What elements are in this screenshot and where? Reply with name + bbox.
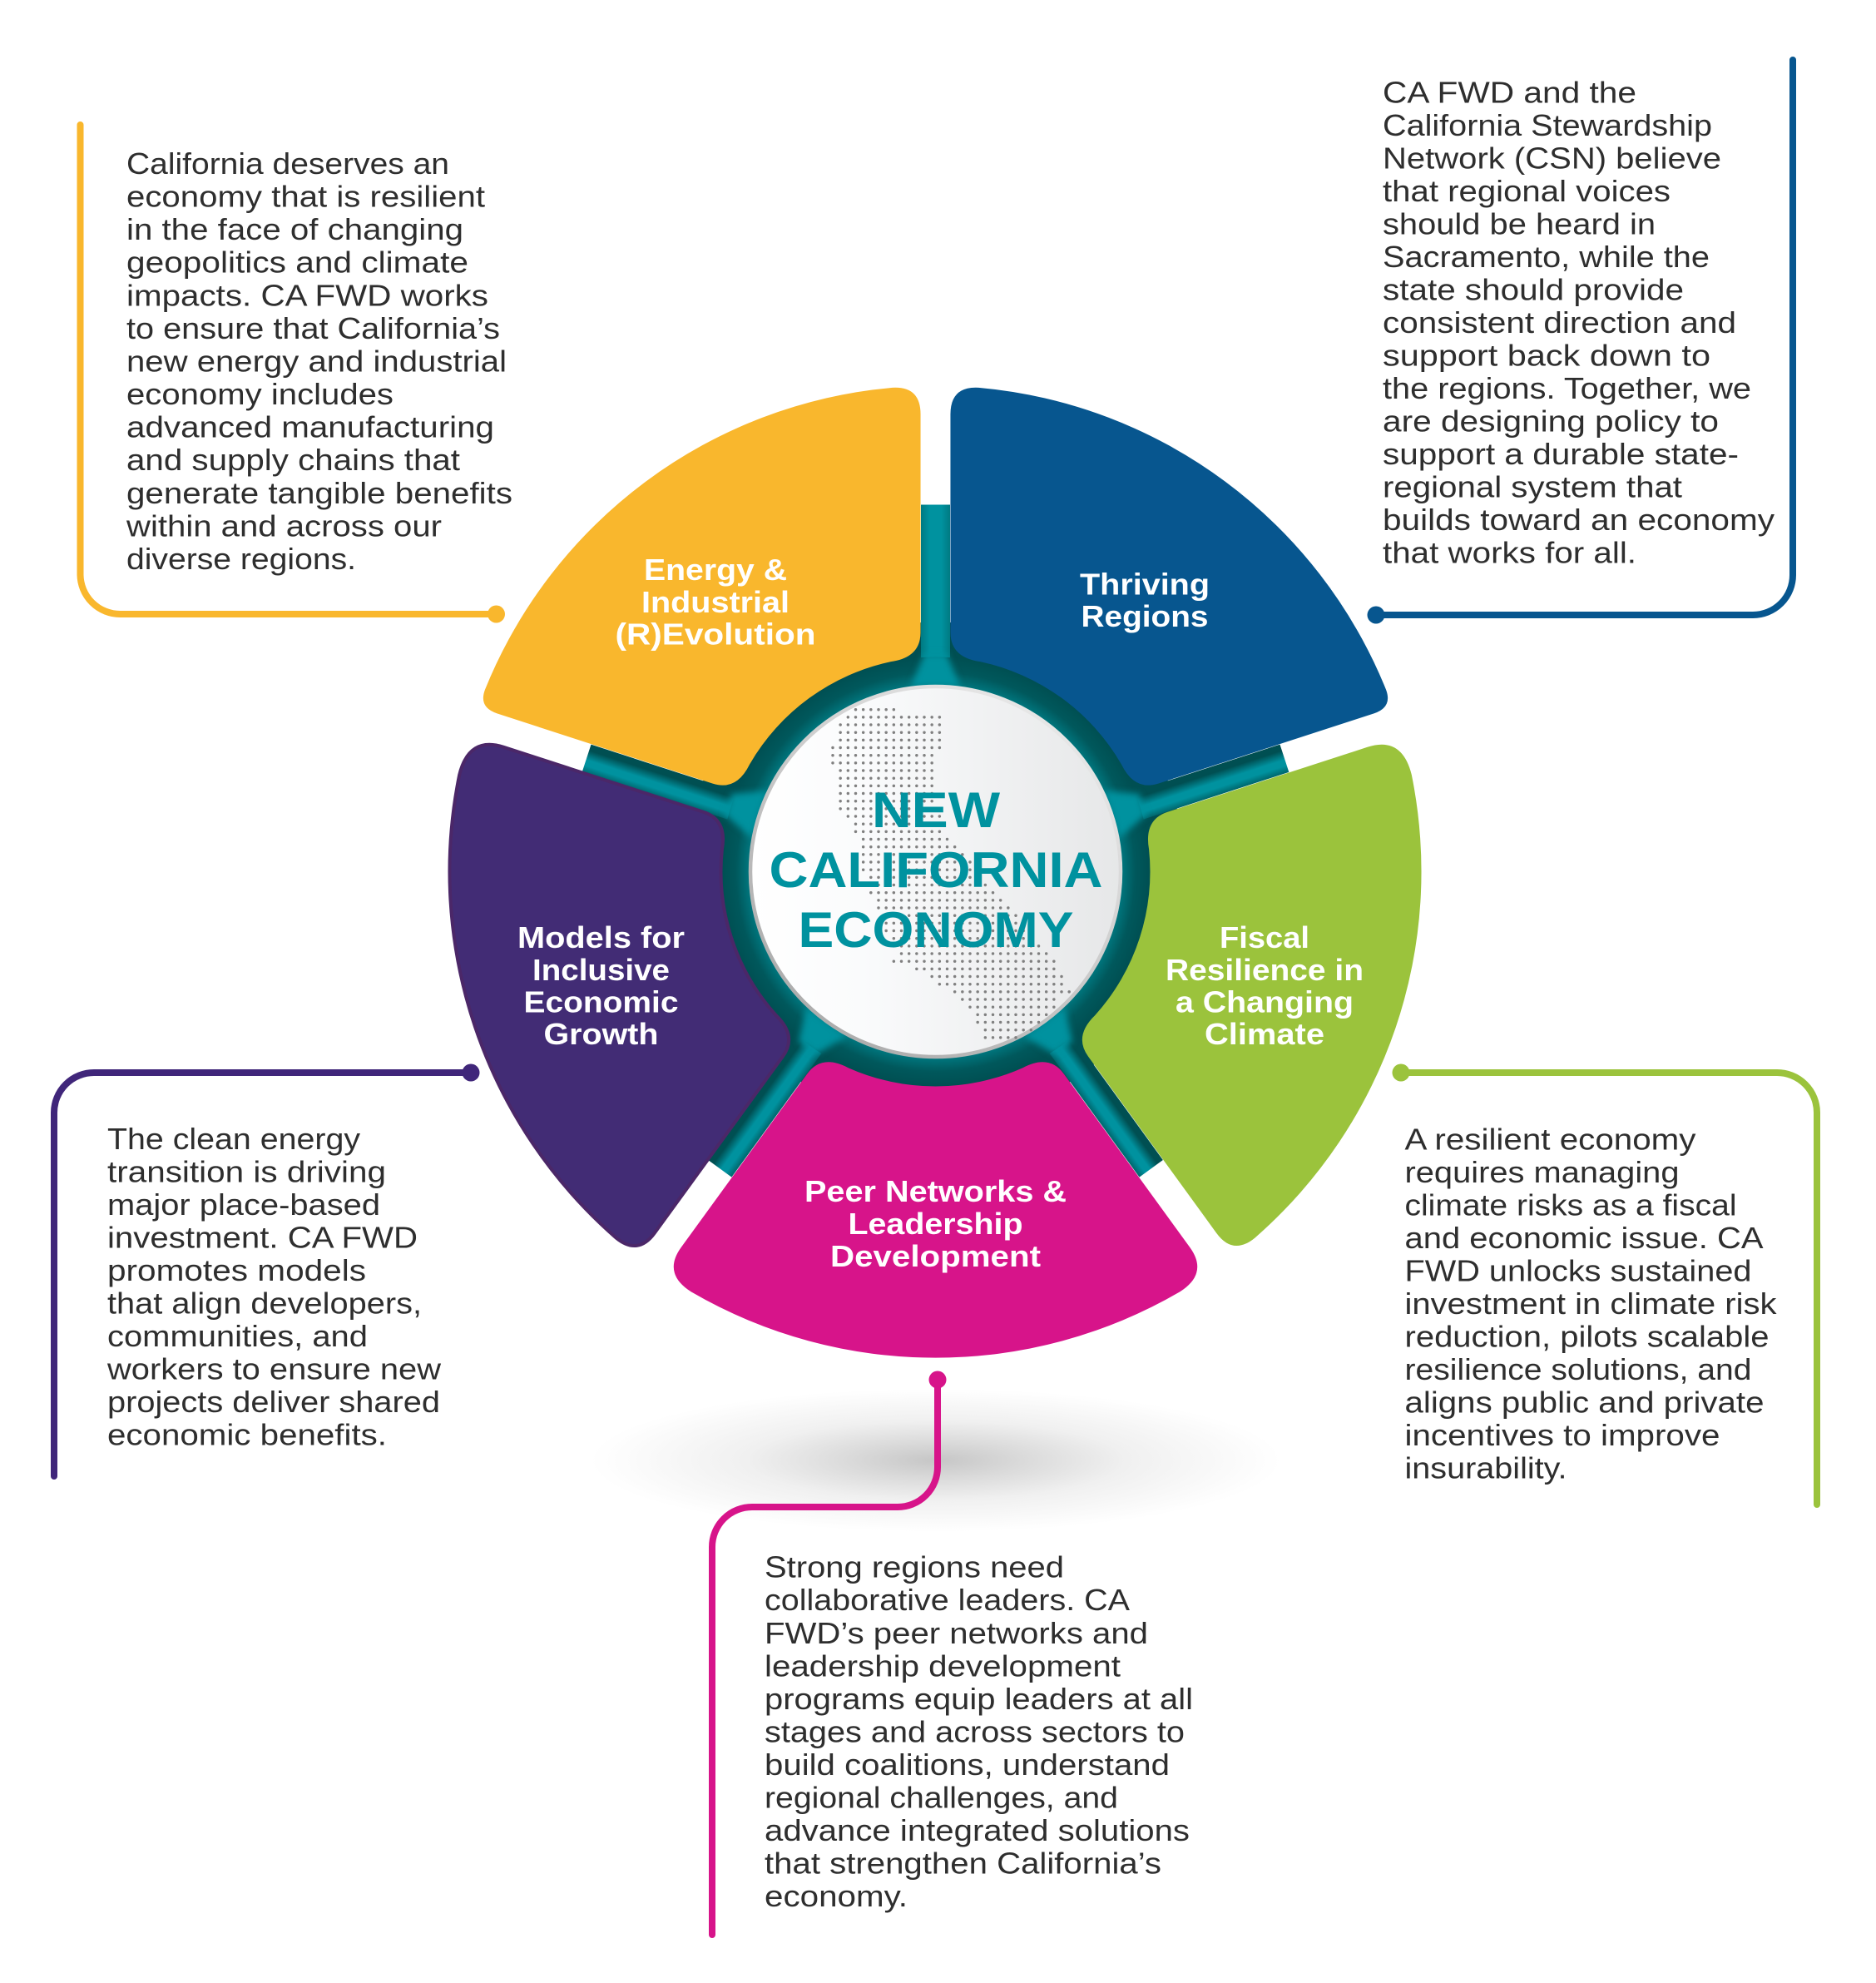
- heading: Energy & Industrial (R)Evolution: Energy &: [644, 553, 787, 587]
- text block: [1383, 75, 1775, 569]
- heading: Fiscal Resilience in a Changing Climate: Climate: [1205, 1017, 1324, 1051]
- text block: requires managing: [1404, 1155, 1679, 1189]
- connector line: [712, 1371, 947, 1935]
- heading: Fiscal Resilience in a Changing Climate: Resilience in: [1166, 953, 1364, 987]
- text block: FWD unlocks sustained: [1404, 1253, 1752, 1288]
- text block: state should provide: [1383, 273, 1684, 306]
- text block: stages and across sectors to: [765, 1714, 1185, 1748]
- heading: Energy & Industrial (R)Evolution: [616, 553, 815, 651]
- callout: Peer Networks & Leadership Development: [712, 1371, 1193, 1935]
- text block: that regional voices: [1383, 174, 1671, 208]
- text block: regional system that: [1383, 469, 1682, 504]
- heading: Thriving Regions: Regions: [1082, 599, 1208, 633]
- text block: aligns public and private: [1404, 1385, 1764, 1420]
- text block: support back down to: [1383, 338, 1710, 373]
- text block: and economic issue. CA: [1404, 1221, 1764, 1255]
- text block: programs equip leaders at all: [765, 1682, 1193, 1716]
- center disc with dotted California map and title: [750, 687, 1121, 1057]
- text block: geopolitics and climate: [126, 245, 468, 280]
- text block: [765, 1550, 1193, 1913]
- text block: Strong regions need: [765, 1550, 1064, 1584]
- heading: Peer Networks & Leadership Development: [804, 1174, 1067, 1273]
- text block: collaborative leaders. CA: [765, 1583, 1131, 1617]
- panel: Energy & Industrial (R)Evolution: [434, 324, 1037, 875]
- callout: Thriving Regions: [1368, 60, 1793, 624]
- text block: and supply chains that: [126, 443, 460, 477]
- connector line: [1368, 60, 1793, 624]
- text block: leadership development: [765, 1648, 1121, 1683]
- text block: incentives to improve: [1404, 1418, 1720, 1452]
- text block: that works for all.: [1383, 536, 1636, 569]
- panel: Fiscal Resilience in a Changing Climate: [1035, 683, 1478, 1272]
- heading: Peer Networks & Leadership Development: Leadership: [849, 1207, 1023, 1241]
- text block: to ensure that California’s: [126, 311, 500, 345]
- heading: Energy & Industrial (R)Evolution: Industrial: [641, 585, 790, 619]
- panel: Models for Inclusive Economic Growth: [393, 683, 836, 1272]
- text block: communities, and: [107, 1319, 368, 1353]
- text block: within and across our: [126, 508, 442, 543]
- heading: Thriving Regions: [1080, 568, 1210, 633]
- heading: Thriving Regions: Thriving: [1080, 568, 1210, 601]
- text block: insurability.: [1404, 1451, 1567, 1485]
- text block: A resilient economy: [1404, 1122, 1696, 1157]
- text block: should be heard in: [1383, 206, 1656, 241]
- text block: support a durable state-: [1383, 437, 1739, 471]
- connector line: [54, 1063, 479, 1476]
- text block: economy.: [765, 1879, 908, 1913]
- text block: projects deliver shared: [107, 1385, 440, 1419]
- text block: climate risks as a fiscal: [1404, 1188, 1737, 1222]
- teal hub: spokes and dark ring: [582, 504, 1289, 1177]
- text block: economy that is resilient: [126, 180, 485, 214]
- text block: [1404, 1122, 1777, 1485]
- text block: that strengthen California’s: [765, 1846, 1161, 1881]
- text block: Network (CSN) believe: [1383, 141, 1721, 175]
- text block: economy includes: [126, 377, 394, 411]
- connector line: [1393, 1063, 1817, 1505]
- text block: consistent direction and: [1383, 305, 1736, 340]
- text block: promotes models: [107, 1253, 366, 1287]
- text block: regional challenges, and: [765, 1780, 1118, 1814]
- ground shadow under the wheel: [591, 1389, 1281, 1532]
- icon: dotted California map: [833, 710, 1070, 1038]
- text block: economic benefits.: [107, 1418, 387, 1451]
- text block: [126, 146, 512, 576]
- text block: build coalitions, understand: [765, 1748, 1170, 1782]
- text block: The clean energy: [107, 1122, 361, 1156]
- text block: impacts. CA FWD works: [126, 278, 488, 312]
- text block: builds toward an economy: [1383, 503, 1775, 537]
- text block: advance integrated solutions: [765, 1813, 1190, 1847]
- heading: Models for Inclusive Economic Growth: [517, 920, 685, 1051]
- heading: Models for Inclusive Economic Growth: Economic: [524, 985, 679, 1019]
- text block: transition is driving: [107, 1155, 386, 1188]
- text block: the regions. Together, we: [1383, 371, 1751, 405]
- title: New California Economy: ECONOMY: [799, 902, 1073, 958]
- text block: CA FWD and the: [1383, 75, 1636, 110]
- heading: Fiscal Resilience in a Changing Climate: Fiscal: [1220, 920, 1309, 954]
- text block: resilience solutions, and: [1404, 1352, 1752, 1386]
- heading: Fiscal Resilience in a Changing Climate: a Changing: [1176, 985, 1354, 1019]
- heading: Models for Inclusive Economic Growth: Inclusive: [532, 953, 670, 987]
- text block: generate tangible benefits: [126, 476, 512, 510]
- text block: advanced manufacturing: [126, 410, 494, 444]
- text block: investment in climate risk: [1404, 1286, 1777, 1321]
- text block: that align developers,: [107, 1286, 422, 1320]
- callout: Fiscal Resilience in a Changing Climate: [1393, 1063, 1817, 1505]
- text block: investment. CA FWD: [107, 1220, 418, 1255]
- title: New California Economy: NEW: [872, 782, 1000, 838]
- text block: workers to ensure new: [106, 1351, 442, 1386]
- text block: major place-based: [107, 1187, 380, 1222]
- text block: new energy and industrial: [126, 345, 507, 378]
- panel: Thriving Regions: [834, 324, 1437, 875]
- callout: Energy & Industrial (R)Evolution: [80, 125, 512, 622]
- text block: Sacramento, while the: [1383, 240, 1710, 274]
- text block: reduction, pilots scalable: [1404, 1320, 1769, 1353]
- heading: Fiscal Resilience in a Changing Climate: [1166, 920, 1364, 1051]
- heading: Models for Inclusive Economic Growth: Growth: [544, 1017, 659, 1051]
- heading: Energy & Industrial (R)Evolution: (R)Evolution: [616, 617, 815, 651]
- text block: diverse regions.: [126, 542, 356, 576]
- text block: California Stewardship: [1383, 108, 1712, 142]
- text block: are designing policy to: [1383, 404, 1719, 438]
- panel: Peer Networks & Leadership Development: [674, 1062, 1197, 1358]
- heading: Models for Inclusive Economic Growth: Models for: [517, 920, 685, 954]
- text block: FWD’s peer networks and: [765, 1616, 1148, 1650]
- connector line: [80, 125, 505, 622]
- callout: Models for Inclusive Economic Growth: [54, 1063, 479, 1476]
- text block: [106, 1122, 442, 1451]
- heading: Peer Networks & Leadership Development: Peer Networks &: [804, 1174, 1067, 1208]
- heading: Peer Networks & Leadership Development: Development: [830, 1239, 1041, 1273]
- text block: California deserves an: [126, 146, 449, 181]
- title: New California Economy: CALIFORNIA: [769, 842, 1103, 898]
- text block: in the face of changing: [126, 212, 463, 246]
- title: New California Economy: [769, 782, 1103, 958]
